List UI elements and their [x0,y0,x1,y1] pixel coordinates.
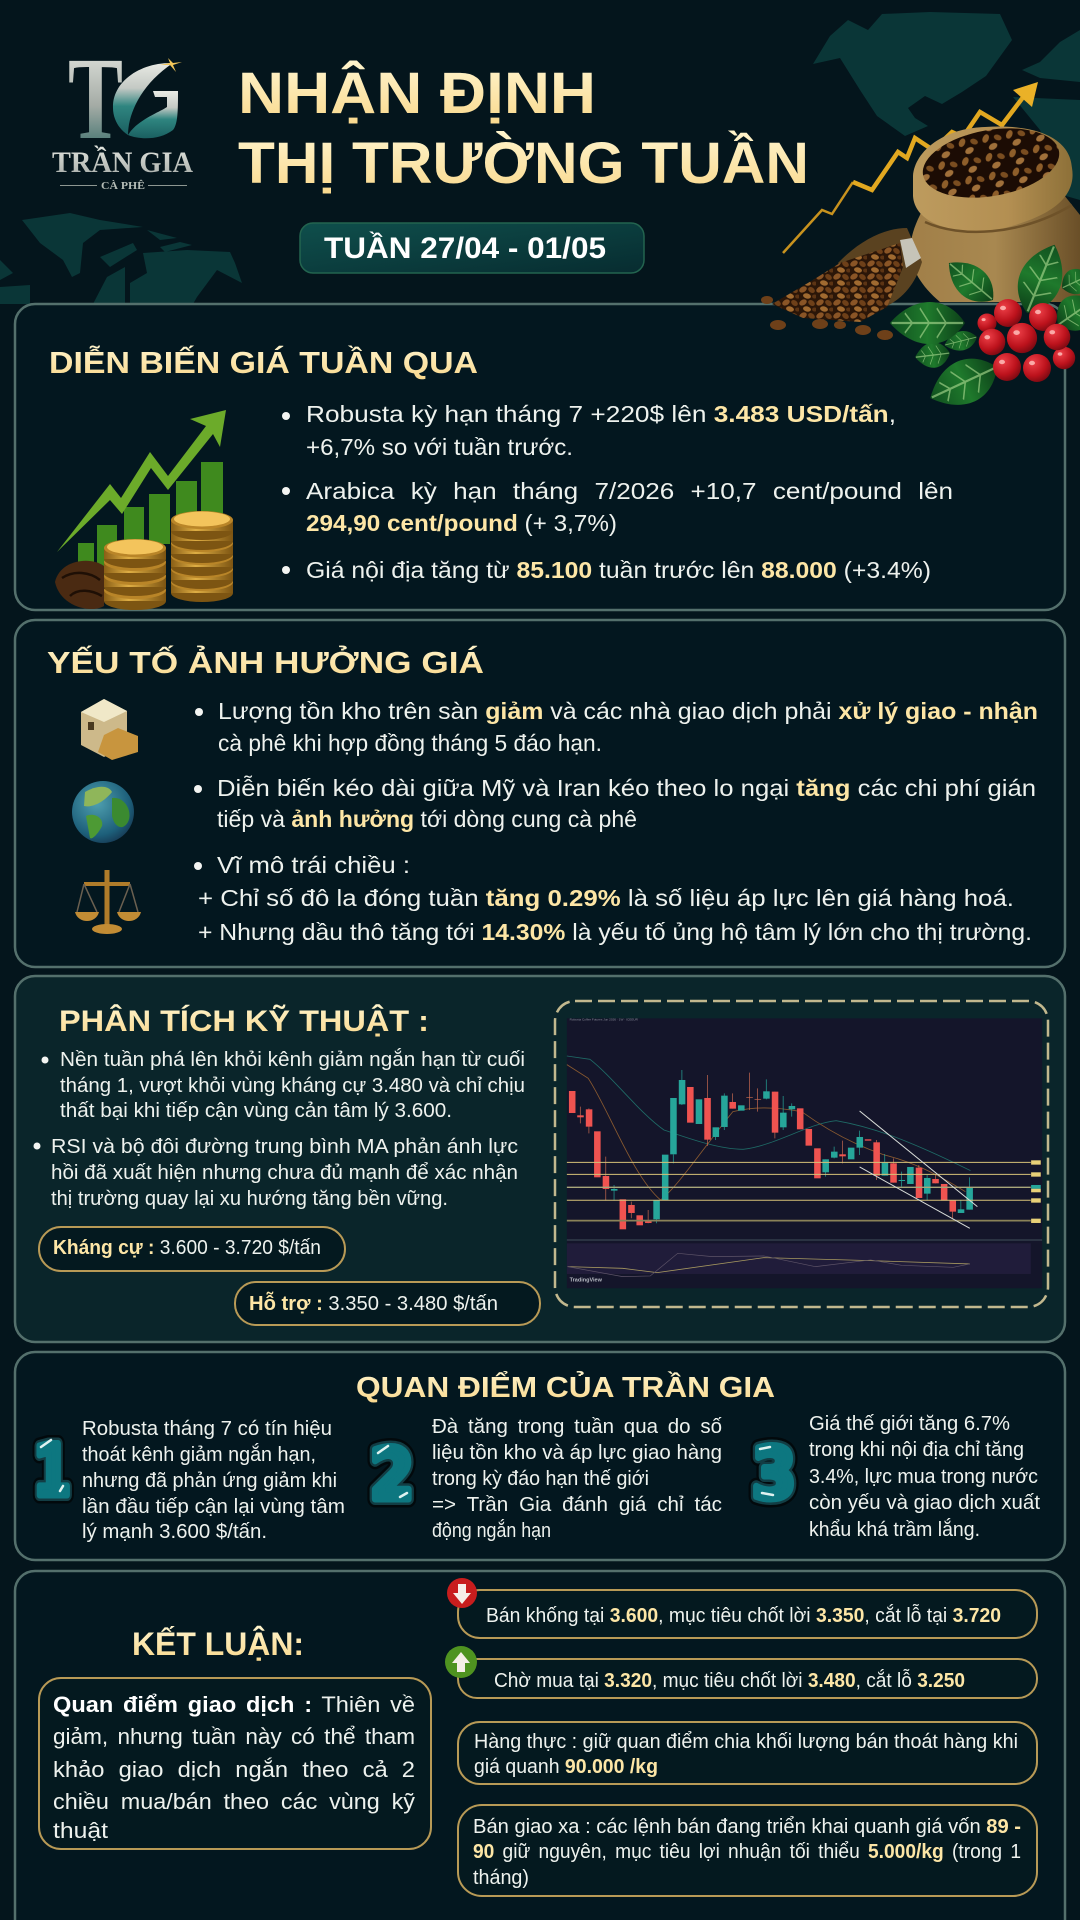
panel: yếu tố ảnh hưởng giá [15,620,1065,967]
number 2: 2 [370,1434,414,1516]
box: bán giao xa: 90 giữ nguyên, mục tiêu lợi nhuận tối thiểu 5.000/kg (trong 1 [473,1841,1021,1863]
column 3 text: khẩu khá trầm lắng. [809,1518,980,1541]
column 1 text: thoát kênh giảm ngắn hạn, [82,1443,316,1466]
candle bodies [569,1080,973,1229]
heading: phân tích kỹ thuật: PHÂN TÍCH KỸ THUẬT : [59,1004,429,1038]
price bullets: +6,7% so với tuần trước. [306,434,573,460]
column 2 text: => Trần Gia đánh giá chỉ tác [432,1494,722,1516]
column 3 text: trong khi nội địa chỉ tăng [809,1439,1024,1461]
technical bullets [34,1048,525,1210]
technical bullets: tháng 1, vượt khỏi vùng kháng cự 3.480 và chỉ chịu [60,1075,525,1097]
column 3 text: còn yếu và giao dịch xuất [809,1492,1040,1514]
leaves [890,237,1080,418]
scoop [838,228,922,312]
icon: growth chart with coins [55,410,233,610]
pill: hỗ trợ: Hỗ trợ : 3.350 - 3.480 $/tấn [249,1291,498,1315]
technical bullets: RSI và bộ đôi đường trung bình MA phản ánh lực [51,1136,518,1158]
number 3: 3 [752,1433,796,1515]
dashed chart frame [555,1001,1048,1307]
icon: warehouse [81,699,138,760]
icon: up arrow [445,1646,477,1678]
box: hàng thực: Hàng thực : giữ quan điểm chia khối lượng bán thoát hàng khi [474,1731,1018,1753]
technical bullets: thị trường quay lại xu hướng tăng bền vững. [51,1188,448,1210]
box: chờ mua: Chờ mua tại 3.320, mục tiêu chốt lời 3.480, cắt lỗ 3.250 [494,1669,965,1692]
number 1: 1 [33,1430,71,1512]
icon: globe [72,781,134,843]
column 2 text: trong kỳ đáo hạn thế giới [432,1468,649,1490]
column 1 text [82,1418,345,1543]
world map: top right [813,12,1080,200]
icon: scales [75,870,141,934]
logo: Trần Gia [52,33,193,192]
box: bán giao xa: Bán giao xa : các lệnh bán đang triển khai quanh giá vốn 89 - [473,1816,1021,1838]
column 3 text: 3.4%, lực mua trong nước [809,1466,1038,1488]
column 1 text: lý mạnh 3.600 $/tấn. [82,1521,267,1543]
box: quan điểm giao dịch: chiều mua/bán theo các vùng kỹ [53,1789,415,1814]
icon: down arrow [447,1578,477,1608]
world map: lower left [0,213,242,304]
week tag: TUẦN 27/04 - 01/05 [324,231,606,265]
logo: Trần Gia: TRẦN GIA [52,145,193,179]
tradingview mark: TradingView [570,1277,603,1283]
number 3: 3 [752,1433,796,1515]
column 1 text: nhưng đã phản ứng giảm khi [82,1470,337,1492]
number 2: 2 [370,1434,414,1516]
technical bullets: Nền tuần phá lên khỏi kênh giảm ngắn hạn từ cuối [60,1048,525,1071]
week tag [300,223,644,273]
number 2: 2 [370,1434,414,1516]
factor bullets: + Nhưng dầu thô tăng tới 14.30% là yếu tố ủng hộ tâm lý lớn cho thị trường. [198,919,1032,945]
berries [977,299,1075,382]
factor bullets [194,698,1038,945]
heading: quan điểm: QUAN ĐIỂM CỦA TRẦN GIA [356,1370,775,1404]
factor bullets: + Chỉ số đô la đóng tuần tăng 0.29% là số liệu áp lực lên giá hàng hoá. [198,885,1014,911]
rising arrow [783,82,1038,253]
panel: kết luận [15,1571,1065,1920]
box: quan điểm giao dịch: Quan điểm giao dịch : Thiên về [53,1692,415,1717]
coffee sack [910,119,1080,302]
price bullets: Giá nội địa tăng từ 85.100 tuần trước lên 88.000 (+3.4%) [306,557,931,583]
logo: Trần Gia: CÀ PHÊ [101,180,145,192]
price bullets [282,401,953,583]
logo: Trần Gia: T [68,33,123,164]
hero illustration: coffee sack, rising arrow, beans, leaves, berries [761,82,1080,418]
column 3 text: Giá thế giới tăng 6.7% [809,1413,1010,1435]
heading: kết luận: KẾT LUẬN: [132,1626,304,1662]
pill: kháng cự [39,1227,345,1271]
title [238,61,809,196]
box: quan điểm giao dịch: khảo giao dịch ngắn theo cả 2 [53,1757,415,1782]
title: NHẬN ĐỊNH [238,61,596,126]
price axis labels [1031,1160,1041,1223]
box: bán khống [458,1590,1037,1638]
number 3: 3 [752,1433,796,1515]
number 1: 1 [33,1430,71,1512]
column 1 text: lần đầu tiếp cận lại vùng tâm [82,1496,345,1518]
panel: diễn biến giá [15,304,1065,610]
price bullets: Arabica kỳ hạn tháng 7/2026 +10,7 cent/pound lên [306,478,953,504]
pill: hỗ trợ [235,1282,540,1325]
box: quan điểm giao dịch: giảm, nhưng tuần này có thể tham [53,1724,415,1749]
chart header: Robusta Coffee Futures Jun 2026 · 1W · ICEEUR [570,1018,639,1022]
factor bullets: Lượng tồn kho trên sàn giảm và các nhà giao dịch phải xử lý giao - nhận [218,698,1038,724]
support and resistance lines [567,1111,1031,1228]
column 3 text [809,1413,1040,1541]
panel: quan điểm của trần gia [15,1352,1065,1560]
column 2 text: liệu tồn kho và áp lực giao hàng [432,1442,722,1464]
box: bán giao xa: tháng) [473,1867,529,1889]
box: quan điểm giao dịch: thuật [53,1818,108,1843]
price bullets: Robusta kỳ hạn tháng 7 +220$ lên 3.483 USD/tấn , [306,401,896,427]
column 2 text: Đà tăng trong tuần qua do số [432,1416,722,1438]
factor bullets: Vĩ mô trái chiều : [217,852,410,878]
column 2 text [432,1416,722,1542]
candle wicks [580,1070,969,1223]
box: bán giao xa [458,1805,1037,1896]
heading: yếu tố: YẾU TỐ ẢNH HƯỞNG GIÁ [47,644,484,680]
candlestick chart [567,1018,1042,1288]
box: chờ mua [458,1659,1037,1698]
box: hàng thực [458,1722,1037,1784]
number 1: 1 [33,1430,71,1512]
price bullets: 294,90 cent/pound (+ 3,7%) [306,510,617,536]
factor bullets: cà phê khi hợp đồng tháng 5 đáo hạn. [218,730,602,756]
box: bán khống: Bán khống tại 3.600, mục tiêu chốt lời 3.350, cắt lỗ tại 3.720 [486,1604,1001,1627]
factor bullets: Diễn biến kéo dài giữa Mỹ và Iran kéo theo lo ngại tăng các chi phí gián [217,775,1036,801]
heading: diễn biến giá: DIỄN BIẾN GIÁ TUẦN QUA [49,345,478,380]
factor bullets: tiếp và ảnh hưởng tới dòng cung cà phê [217,806,637,832]
box: quan điểm giao dịch [39,1678,431,1849]
box: hàng thực: giá quanh 90.000 /kg [474,1756,658,1778]
column 1 text: Robusta tháng 7 có tín hiệu [82,1418,332,1440]
bean pile [761,243,903,340]
column 2 text: động ngắn hạn [432,1519,551,1542]
panel: phân tích kỹ thuật [15,976,1065,1342]
technical bullets: thất bại khi tiếp cận vùng cản tâm lý 3.600. [60,1100,452,1122]
title: THỊ TRƯỜNG TUẦN [238,131,809,196]
pill: kháng cự: Kháng cự : 3.600 - 3.720 $/tấn [53,1237,321,1259]
technical bullets: hồi đã xuất hiện nhưng chưa đủ mạnh để xác nhận [51,1162,518,1184]
